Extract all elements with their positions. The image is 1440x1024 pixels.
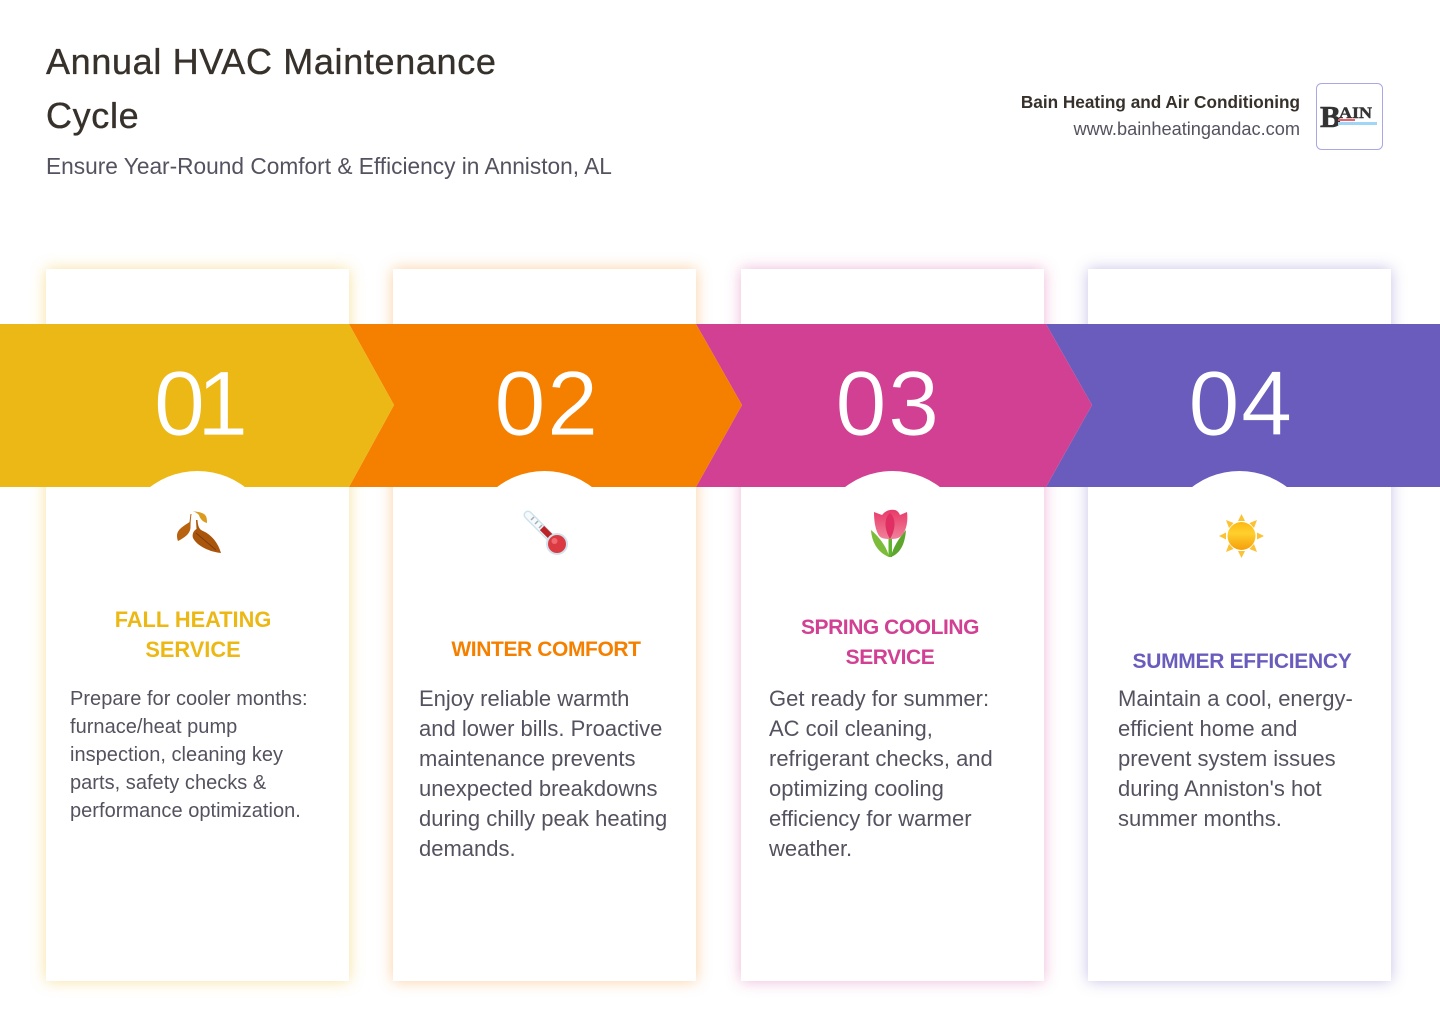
text: spring description: weather. — [769, 836, 852, 861]
card 3 panel — [741, 269, 1044, 981]
text: spring description: efficiency for warmer — [769, 806, 972, 831]
title — [46, 41, 497, 136]
text: fall description: furnace/heat pump — [70, 716, 237, 738]
step number 02: 02 — [494, 353, 600, 455]
text: winter description — [419, 686, 667, 861]
subtitle: Ensure Year-Round Comfort & Efficiency in Anniston, AL — [46, 153, 612, 179]
text: fall description — [70, 688, 308, 822]
title: Annual HVAC Maintenance — [46, 41, 497, 82]
text: winter description: unexpected breakdowns — [419, 776, 658, 801]
heading: fall heating service — [115, 607, 271, 662]
heading: spring cooling service: SERVICE — [846, 646, 934, 669]
text: spring description: Get ready for summer: — [769, 686, 989, 711]
arrow 3 — [696, 324, 1092, 487]
company name: Bain Heating and Air Conditioning — [1021, 92, 1300, 112]
text: spring description: optimizing cooling — [769, 776, 944, 801]
text: spring description — [769, 686, 993, 861]
icon: thermometer — [524, 510, 568, 555]
card 4 panel — [1088, 269, 1391, 981]
heading: winter comfort: WINTER COMFORT — [451, 638, 641, 661]
heading: spring cooling service: SPRING COOLING — [801, 616, 979, 639]
arrow 1 — [0, 324, 394, 487]
text: winter description: demands. — [419, 836, 516, 861]
card 2 panel — [393, 269, 696, 981]
text: winter description: and lower bills. Proactive — [419, 716, 662, 741]
text: summer description: summer months. — [1118, 806, 1282, 831]
heading: fall heating service: SERVICE — [145, 637, 241, 662]
text: summer description: efficient home and — [1118, 716, 1297, 741]
text: spring description: AC coil cleaning, — [769, 716, 933, 741]
arrow band — [0, 324, 1440, 487]
heading: fall heating service: FALL HEATING — [115, 607, 271, 632]
heading: spring cooling service — [801, 616, 979, 669]
text: winter description: Enjoy reliable warmth — [419, 686, 629, 711]
icon: sun — [1219, 514, 1264, 558]
text: winter description: during chilly peak heating — [419, 806, 667, 831]
logo: AIN — [1339, 105, 1372, 122]
logo: B — [1320, 99, 1341, 134]
text: fall description: parts, safety checks & — [70, 772, 266, 794]
text: summer description: prevent system issues — [1118, 746, 1336, 771]
company website: www.bainheatingandac.com — [1074, 119, 1300, 139]
text: summer description: Maintain a cool, energy- — [1118, 686, 1353, 711]
icon circles — [150, 471, 1287, 487]
heading: summer efficiency: SUMMER EFFICIENCY — [1133, 650, 1351, 673]
text: winter description: maintenance prevents — [419, 746, 635, 771]
text: fall description: Prepare for cooler months: — [70, 688, 308, 710]
icon: tulip — [871, 510, 908, 557]
card 1 panel — [46, 269, 349, 981]
arrow 4 — [1046, 324, 1440, 487]
logo — [1316, 83, 1383, 150]
text: summer description — [1118, 686, 1353, 831]
text: fall description: inspection, cleaning key — [70, 744, 283, 766]
step number 03: 03 — [835, 353, 941, 455]
icon: autumn leaves — [177, 511, 221, 553]
step number 04: 04 — [1188, 353, 1294, 455]
text: spring description: refrigerant checks, and — [769, 746, 993, 771]
text: summer description: during Anniston's hot — [1118, 776, 1322, 801]
title: Cycle — [46, 95, 139, 136]
arrow 2 — [349, 324, 742, 487]
text: fall description: performance optimization. — [70, 800, 301, 822]
step number 01: 01 — [154, 353, 240, 455]
